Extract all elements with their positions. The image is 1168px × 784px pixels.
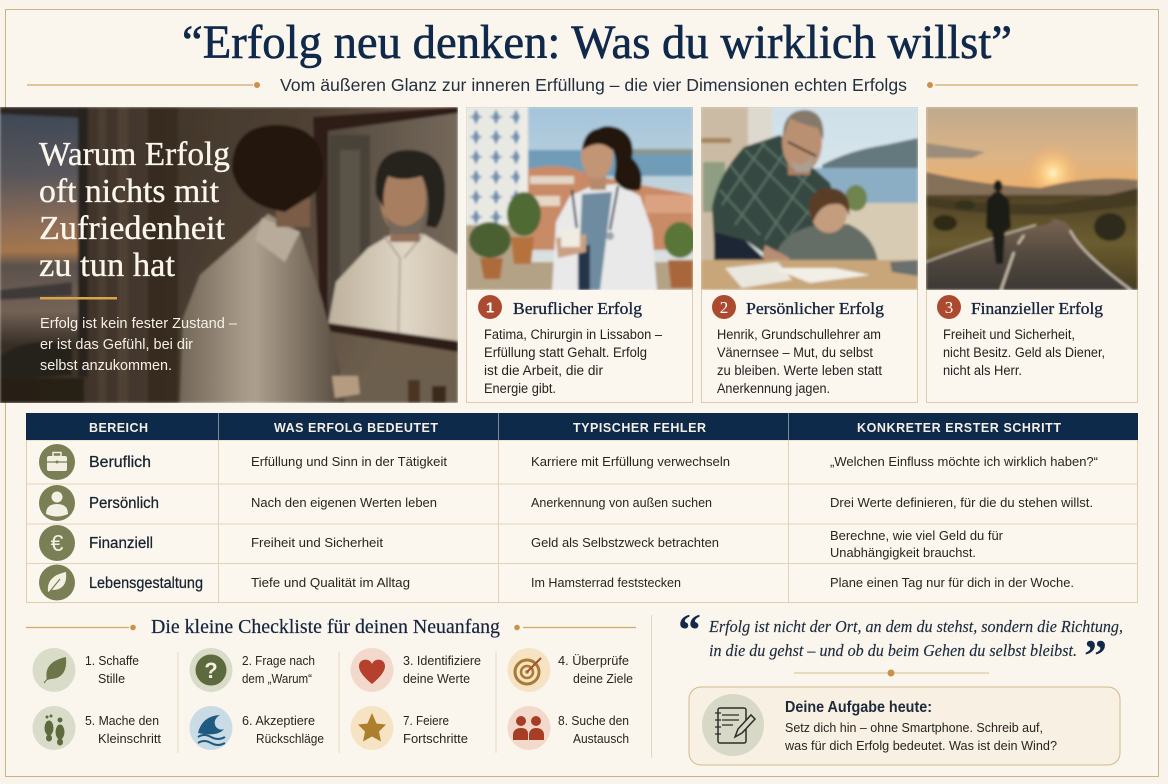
row: Lebensgestaltung bbox=[39, 564, 1074, 600]
card text: Erfüllung statt Gehalt. Erfolg bbox=[484, 345, 647, 360]
item 8: 8. Suche den bbox=[558, 713, 629, 728]
card text: Henrik, Grundschullehrer am bbox=[717, 327, 881, 342]
row: Lebensgestaltung: Im Hamsterrad feststecken bbox=[531, 575, 681, 590]
row: Finanziell: Berechne, wie viel Geld du für bbox=[830, 528, 1004, 543]
photo: teacher with child bbox=[701, 107, 918, 290]
card text bbox=[484, 327, 662, 396]
number badge 1 bbox=[478, 295, 502, 319]
item 1: Stille bbox=[98, 671, 125, 686]
item 3: 3. Identifiziere bbox=[403, 653, 481, 668]
item 7: 7. Feiere bbox=[403, 713, 449, 728]
hero paragraph: selbst anzukommen. bbox=[40, 358, 172, 374]
icon: person bbox=[39, 485, 75, 521]
item 6: Rückschläge bbox=[256, 731, 324, 746]
panel: card 3 finanzieller Erfolg bbox=[926, 107, 1138, 402]
panel: card 1 beruflicher Erfolg bbox=[466, 107, 696, 402]
table header: BEREICH bbox=[89, 421, 148, 435]
title: “Erfolg neu denken: Was du wirklich willst” bbox=[182, 16, 1012, 69]
table header: TYPISCHER FEHLER bbox=[573, 421, 706, 435]
quote: Erfolg ist nicht der Ort, an dem du stehst, sondern die Richtung, bbox=[708, 617, 1123, 636]
card text: Freiheit und Sicherheit, bbox=[943, 327, 1075, 342]
row: Lebensgestaltung: Plane einen Tag nur für dich in der Woche. bbox=[830, 575, 1074, 590]
item 2: dem „Warum“ bbox=[242, 671, 312, 686]
row: Persönlich: Nach den eigenen Werten leben bbox=[251, 495, 437, 510]
item 5: Kleinschritt bbox=[98, 731, 161, 746]
item 8 bbox=[508, 706, 629, 750]
item 8: Austausch bbox=[573, 731, 629, 746]
icon: closing quote mark: ” bbox=[1084, 630, 1107, 681]
item 2: ? bbox=[204, 658, 218, 683]
item 1 bbox=[32, 648, 139, 692]
hero heading: zu tun hat bbox=[39, 247, 176, 284]
card text: nicht als Herr. bbox=[943, 363, 1022, 378]
hero heading: Warum Erfolg bbox=[39, 136, 230, 173]
icon: euro: € bbox=[51, 530, 64, 556]
row: Lebensgestaltung: Tiefe und Qualität im Alltag bbox=[251, 575, 410, 590]
row: Beruflich: „Welchen Einfluss möchte ich wirklich haben?“ bbox=[830, 454, 1098, 469]
item 4: deine Ziele bbox=[573, 671, 633, 686]
row: Beruflich: Karriere mit Erfüllung verwechseln bbox=[531, 454, 730, 469]
checklist heading bbox=[26, 616, 636, 638]
table: dimensions of success bbox=[26, 413, 1138, 602]
quote bbox=[678, 604, 1123, 681]
hero heading: oft nichts mit bbox=[39, 173, 220, 210]
icon: leaf bbox=[39, 564, 75, 600]
checklist heading: Die kleine Checkliste für deinen Neuanfang bbox=[151, 616, 500, 638]
checklist bbox=[32, 648, 633, 753]
number badge 3 bbox=[937, 295, 961, 319]
callout: task for today: Setz dich hin – ohne Smartphone. Schreib auf, bbox=[785, 720, 1043, 735]
card title: Persönlicher Erfolg bbox=[746, 299, 885, 318]
row: Finanziell: Freiheit und Sicherheit bbox=[251, 535, 383, 550]
row: Persönlich: Anerkennung von außen suchen bbox=[531, 495, 712, 510]
row: Beruflich bbox=[39, 444, 1098, 480]
table header bbox=[26, 413, 1138, 440]
row: Finanziell: Finanziell bbox=[89, 535, 153, 552]
subtitle with ornaments: Vom äußeren Glanz zur inneren Erfüllung – die vier Dimensionen echten Erfolgs bbox=[280, 75, 907, 95]
card title: Finanzieller Erfolg bbox=[971, 299, 1104, 318]
row: Lebensgestaltung: Lebensgestaltung bbox=[89, 575, 203, 592]
callout: task for today bbox=[689, 687, 1120, 765]
row: Finanziell: Unabhängigkeit brauchst. bbox=[830, 545, 976, 560]
card text: Vänernsee – Mut, du selbst bbox=[717, 345, 873, 360]
row: Finanziell bbox=[39, 525, 1004, 561]
item 4: 4. Überprüfe bbox=[558, 653, 629, 668]
card text: Energie gibt. bbox=[484, 381, 556, 396]
item 7: Fortschritte bbox=[403, 731, 468, 746]
card title: Beruflicher Erfolg bbox=[513, 299, 643, 318]
row: Beruflich: Erfüllung und Sinn in der Tätigkeit bbox=[251, 454, 447, 469]
table header: WAS ERFOLG BEDEUTET bbox=[274, 421, 438, 435]
row: Beruflich: Beruflich bbox=[89, 454, 151, 471]
card text: ist die Arbeit, die dir bbox=[484, 363, 604, 378]
item 2: 2. Frage nach bbox=[242, 653, 315, 668]
item 7 bbox=[350, 706, 468, 750]
card text bbox=[943, 327, 1105, 378]
hero paragraph: er ist das Gefühl, bei dir bbox=[40, 337, 193, 353]
card text: Fatima, Chirurgin in Lissabon – bbox=[484, 327, 662, 342]
number badge 3: 3 bbox=[945, 298, 953, 317]
row: Persönlich bbox=[39, 485, 1093, 521]
item 2 bbox=[190, 648, 315, 692]
table header: KONKRETER ERSTER SCHRITT bbox=[857, 421, 1061, 435]
item 3 bbox=[350, 648, 481, 692]
item 4 bbox=[508, 648, 633, 692]
card text: nicht Besitz. Geld als Diener, bbox=[943, 345, 1105, 360]
panel: card 2 persönlicher Erfolg bbox=[701, 107, 918, 402]
photo: man on sunset road bbox=[926, 107, 1138, 290]
hero heading bbox=[39, 136, 230, 284]
photo: doctor in Lisbon bbox=[466, 107, 696, 290]
callout: task for today: Deine Aufgabe heute: bbox=[785, 699, 932, 716]
item 1: 1. Schaffe bbox=[85, 653, 139, 668]
item 6 bbox=[190, 706, 324, 750]
row: Persönlich: Drei Werte definieren, für die du stehen willst. bbox=[830, 495, 1093, 510]
row: Persönlich: Persönlich bbox=[89, 495, 159, 512]
icon: opening quote mark: “ bbox=[678, 604, 701, 655]
item 5 bbox=[32, 706, 161, 750]
quote: in die du gehst – und ob du beim Gehen du selbst bleibst. bbox=[709, 641, 1077, 660]
row: Finanziell: Geld als Selbstzweck betrachten bbox=[531, 535, 719, 550]
card text: zu bleiben. Werte leben statt bbox=[717, 363, 882, 378]
hero heading: Zufriedenheit bbox=[39, 210, 226, 247]
subtitle with ornaments bbox=[27, 75, 1138, 95]
item 6: 6. Akzeptiere bbox=[242, 713, 315, 728]
icon: euro bbox=[39, 525, 75, 561]
callout: task for today: was für dich Erfolg bedeutet. Was ist dein Wind? bbox=[784, 738, 1057, 753]
number badge 2: 2 bbox=[720, 298, 728, 317]
number badge 2 bbox=[712, 295, 736, 319]
card text: Anerkennung jagen. bbox=[717, 381, 830, 396]
card text bbox=[717, 327, 882, 396]
panel: hero mirror photo bbox=[0, 107, 458, 403]
icon: notebook and pencil bbox=[702, 694, 764, 756]
item 5: 5. Mache den bbox=[85, 713, 159, 728]
icon: briefcase bbox=[39, 444, 75, 480]
item 3: deine Werte bbox=[403, 671, 470, 686]
hero paragraph: Erfolg ist kein fester Zustand – bbox=[40, 316, 238, 332]
hero paragraph bbox=[40, 316, 238, 374]
number badge 1: 1 bbox=[486, 300, 494, 316]
